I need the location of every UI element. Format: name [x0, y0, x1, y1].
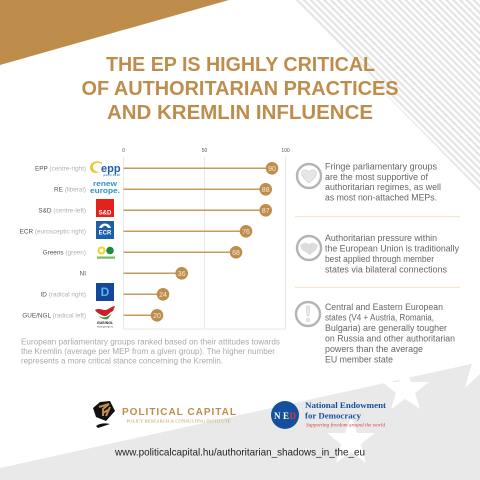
chart caption: European parliamentary groups ranked based on their attitudes towards — [21, 336, 280, 346]
row labels: S&D (centre-left) — [38, 207, 86, 214]
chart caption: represents a more critical stance concerning the Kremlin. — [21, 356, 223, 366]
row labels: GUE/NGL (radical left) — [22, 312, 86, 319]
emblem — [93, 401, 115, 428]
logo: S&D — [96, 199, 114, 217]
logo: National Endowment for Democracy — [271, 400, 386, 429]
logo: Renew Europe — [90, 181, 120, 195]
logo: ECR — [96, 221, 114, 239]
text: authoritarian pressure: Authoritarian pressure within — [325, 233, 437, 243]
logo: EPP — [90, 161, 121, 177]
icon: exclamation mark — [296, 302, 320, 326]
chart caption — [21, 336, 280, 366]
text: Central and Eastern Europe: on Russia and other authoritarian — [325, 334, 455, 344]
panel: authoritarian pressure finding — [297, 233, 459, 274]
logo: Renew Europe: renew — [93, 181, 118, 188]
row labels: EPP (centre-right) — [35, 165, 86, 172]
row labels: RE (liberal) — [54, 186, 86, 193]
row labels: ID (radical right) — [41, 291, 86, 298]
lollipop bars — [124, 168, 272, 315]
text: authoritarian pressure: best applied through member — [325, 254, 434, 264]
logo: GUE/NGL: www.guengl.eu — [97, 326, 114, 328]
icon: heart — [297, 164, 321, 188]
logo: EPP: epp — [101, 163, 121, 175]
decoration: hatched corner — [293, 0, 480, 191]
text: authoritarian pressure: the European Union is traditionally — [325, 244, 459, 254]
title: THE EP IS HIGHLY CRITICAL — [106, 54, 375, 76]
panel: fringe groups finding — [297, 162, 441, 202]
decoration: grey footer band with stars — [0, 358, 480, 480]
logo: National Endowment for Democracy: D — [290, 411, 296, 421]
text: Central and Eastern Europe: states (V4 + Austria, Romania, — [325, 312, 434, 322]
value labels: 76 — [242, 229, 250, 236]
chart: lollipop ranking of parliamentary groups — [20, 148, 290, 329]
logo: National Endowment for Democracy: Supporting freedom around the world — [306, 424, 386, 428]
panel: Central and Eastern Europe finding — [296, 302, 455, 364]
value labels: 87 — [262, 208, 270, 215]
text: Central and Eastern Europe: Bulgaria) are generally tougher — [325, 323, 447, 333]
logo: Greens — [97, 246, 115, 259]
text: fringe groups: as most non-attached MEPs. — [325, 192, 437, 202]
decoration: gold corner triangle — [0, 0, 229, 65]
text: fringe groups: are the most supportive of — [325, 172, 428, 182]
logo: Renew Europe: europe. — [90, 188, 120, 195]
value labels: 20 — [153, 313, 161, 320]
chart axis: 0 — [122, 148, 125, 154]
value labels: 24 — [159, 292, 167, 299]
row labels: NI — [80, 270, 86, 277]
chart axis — [122, 148, 290, 329]
value labels — [153, 166, 276, 320]
text: Central and Eastern Europe: powers than the average — [325, 344, 423, 354]
value labels: 36 — [178, 271, 186, 278]
text: fringe groups: Fringe parliamentary groups — [325, 162, 437, 172]
icon: handshake — [297, 236, 321, 260]
logo: S&D: S&D — [99, 210, 112, 216]
text: fringe groups — [325, 162, 441, 202]
logo: Political Capital: POLICY RESEARCH & CONSULTING INSTITUTE — [126, 418, 231, 424]
logo: ID: D — [101, 285, 110, 299]
logo: ECR: ECR — [99, 230, 112, 236]
text: authoritarian pressure: states via bilateral connections — [325, 264, 447, 274]
website URL: www.politicalcapital.hu/authoritarian_shadows_in_the_eu — [114, 446, 365, 458]
text: fringe groups: authoritarian regimes, as well — [325, 182, 441, 192]
row labels: Greens (green) — [43, 249, 86, 256]
logo: EPP: group in the EP — [103, 174, 121, 177]
title: OF AUTHORITARIAN PRACTICES — [82, 78, 398, 100]
title: AND KREMLIN INFLUENCE — [107, 102, 373, 124]
value labels: 68 — [232, 250, 240, 257]
value labels: 90 — [268, 166, 276, 173]
text: Central and Eastern Europe: EU member state — [325, 354, 393, 364]
row labels: ECR (eurosceptic right) — [20, 228, 86, 235]
logo: Political Capital: POLITICAL CAPITAL — [122, 407, 236, 418]
logo: National Endowment for Democracy: for Democracy — [305, 410, 362, 420]
row labels — [20, 165, 86, 319]
chart axis: 50 — [202, 148, 207, 154]
logo: GUE/NGL: GUE/NGL — [97, 321, 114, 325]
text: Central and Eastern Europe: Central and Eastern European — [325, 302, 443, 312]
value markers — [151, 162, 278, 322]
logo: National Endowment for Democracy: NE — [274, 411, 289, 421]
title — [82, 54, 398, 124]
logo: GUE/NGL — [95, 306, 115, 328]
text: authoritarian pressure — [325, 233, 459, 274]
chart caption: the Kremlin (average per MEP from a given group). The higher number — [21, 346, 275, 356]
value labels: 88 — [262, 187, 270, 194]
chart axis: 100 — [281, 148, 290, 154]
logo: Political Capital — [93, 401, 236, 428]
text: Central and Eastern Europe — [325, 302, 455, 364]
logo: National Endowment for Democracy: National Endowment — [305, 400, 386, 410]
logo: ID — [96, 283, 114, 301]
